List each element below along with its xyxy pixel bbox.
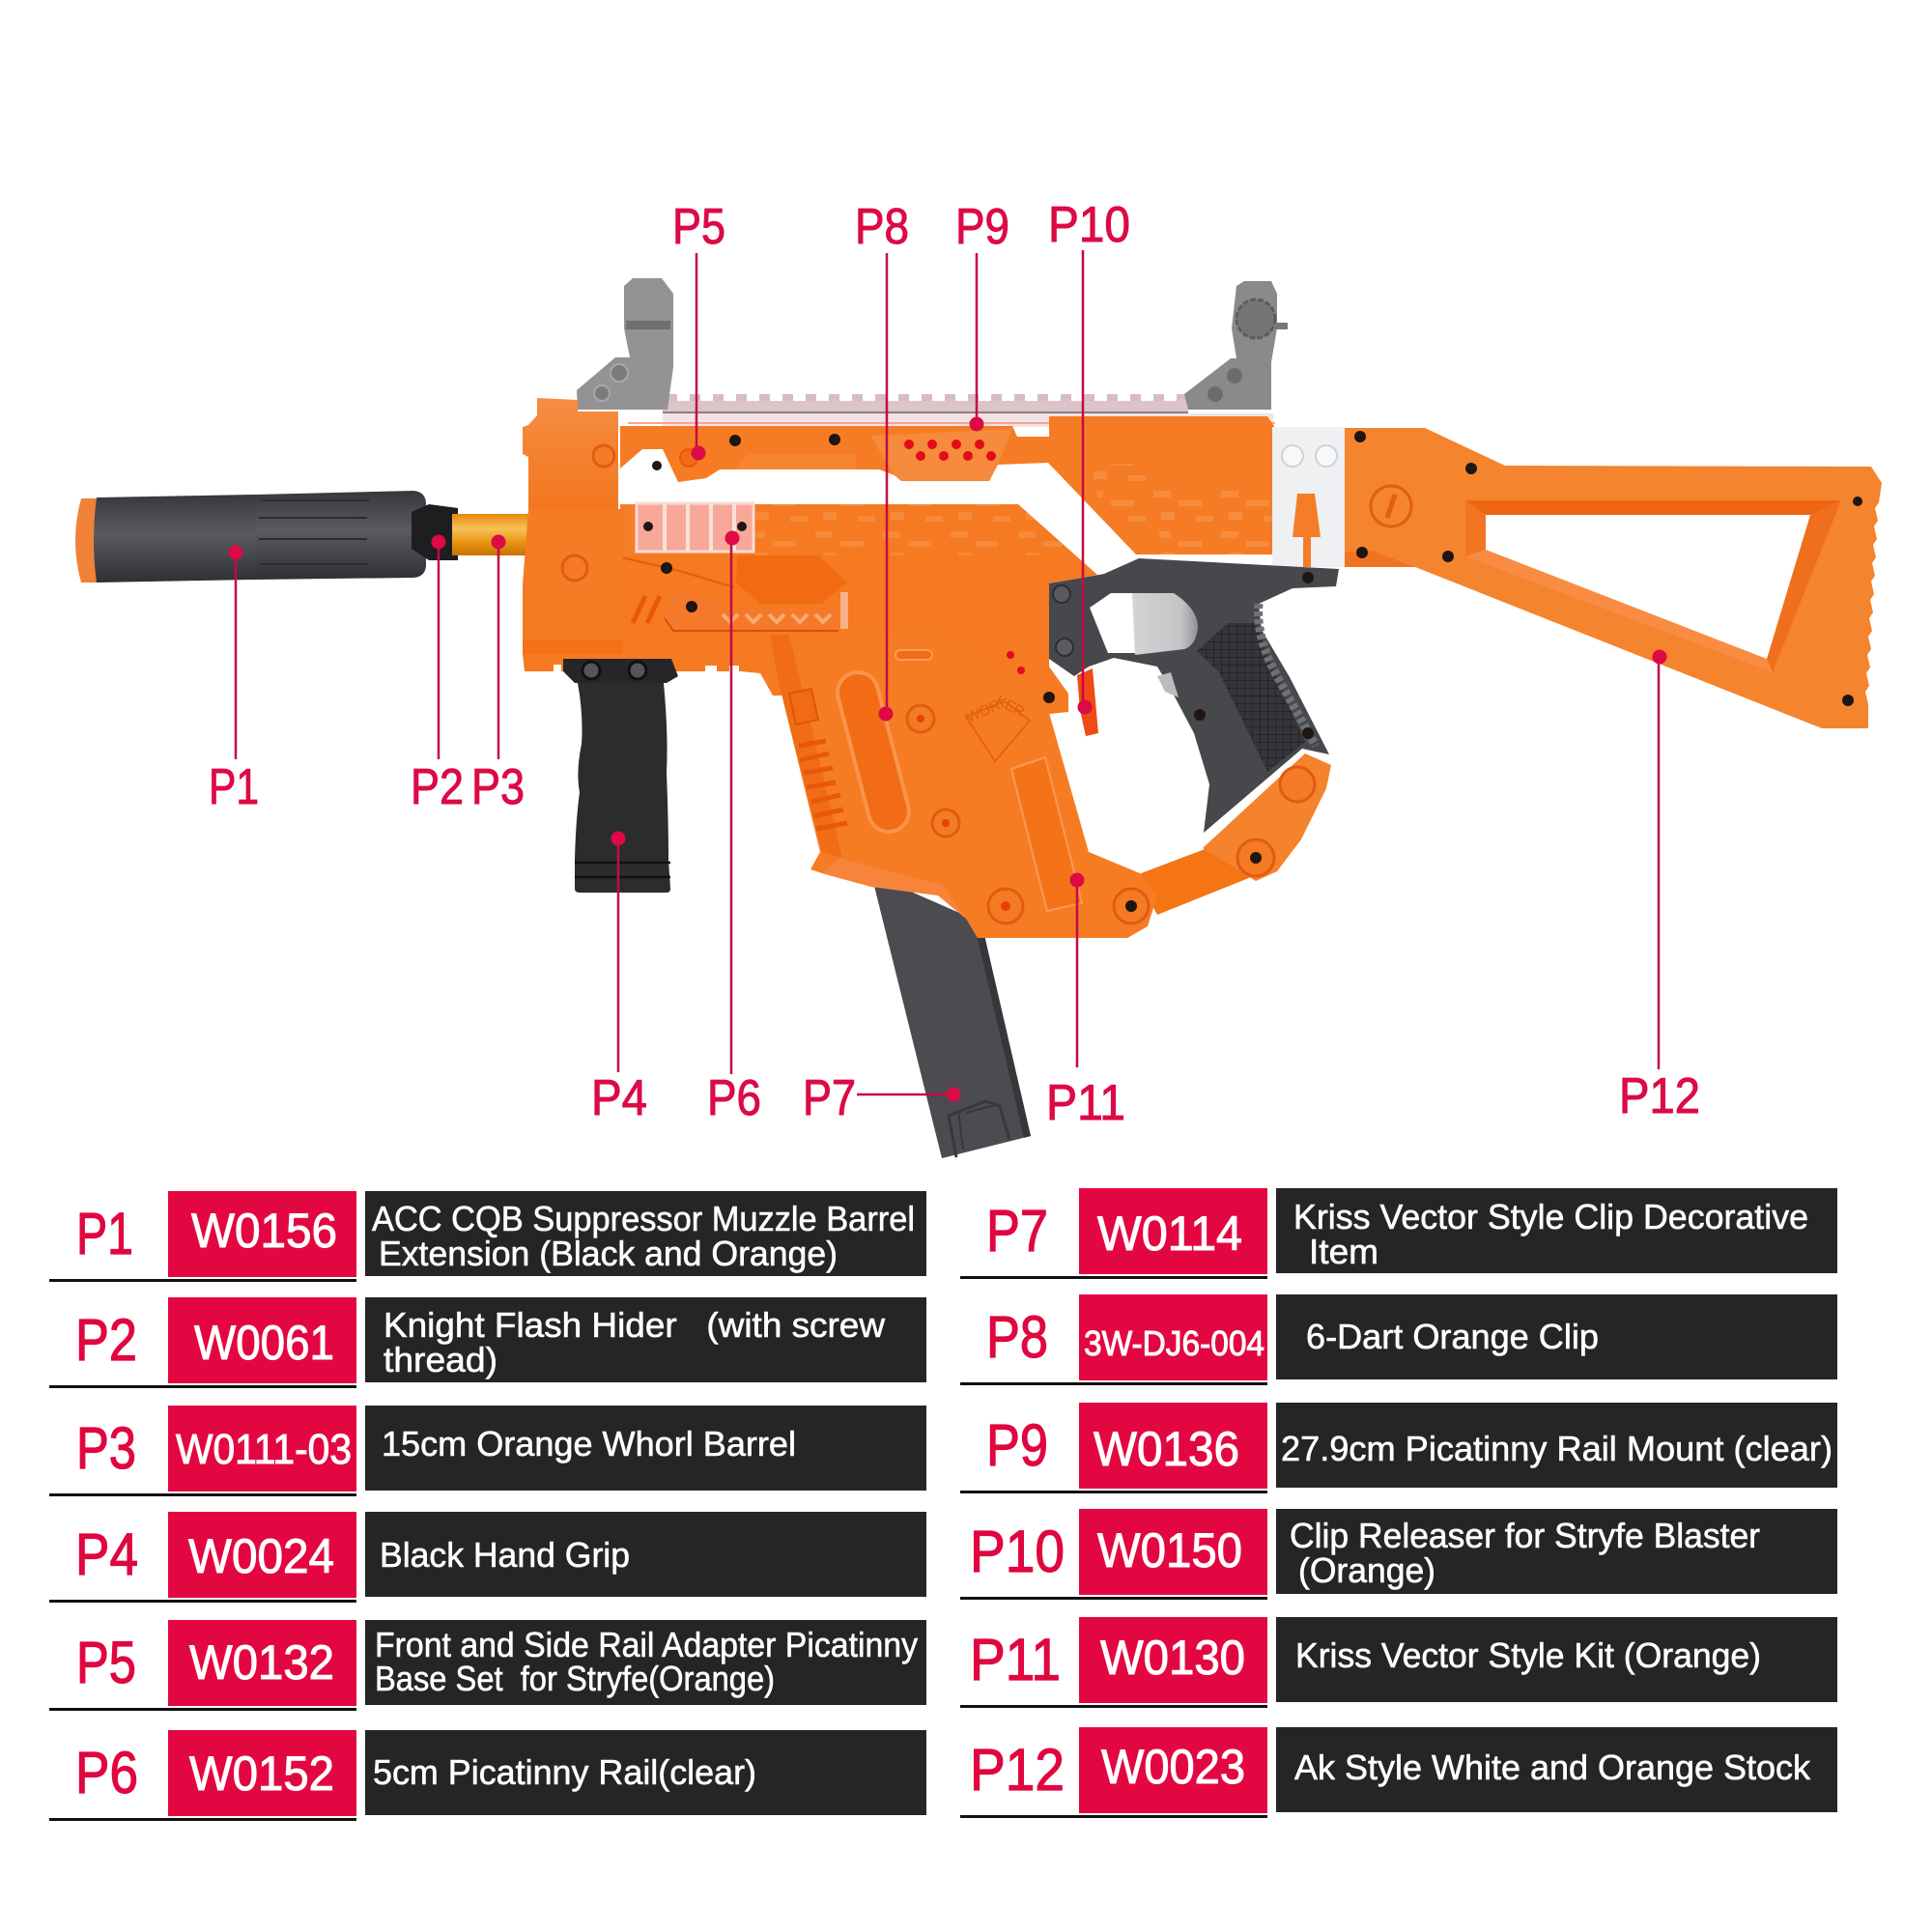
callout: P1: P1 <box>209 759 259 815</box>
magazine clip <box>871 874 1031 1158</box>
row: P1: W0156 <box>191 1204 337 1258</box>
row: P12: Ak Style White and Orange Stock <box>1294 1747 1811 1787</box>
row: P10 <box>960 1509 1837 1600</box>
row: P2: thread) <box>384 1340 497 1379</box>
callout: P4 <box>591 831 647 1126</box>
row: P8: 6-Dart Orange Clip <box>1306 1317 1599 1356</box>
row: P5 <box>49 1620 926 1711</box>
maker logo: KER <box>993 693 1027 721</box>
row: P12: P12 <box>970 1737 1065 1803</box>
flash hider <box>412 504 458 560</box>
callout: P11 <box>1046 873 1125 1131</box>
row: P4: Black Hand Grip <box>380 1535 630 1575</box>
row: P3: 15cm Orange Whorl Barrel <box>382 1424 796 1463</box>
upper receiver band <box>620 416 1274 554</box>
row: P6: P6 <box>75 1740 138 1805</box>
row: P10: P10 <box>970 1519 1065 1584</box>
row: P1 <box>49 1191 926 1282</box>
clip release trigger P10 <box>1077 668 1098 736</box>
row: P6: W0152 <box>189 1747 334 1801</box>
callout: P8: P8 <box>855 199 909 255</box>
white clip <box>1272 427 1345 567</box>
orange barrel <box>452 514 528 555</box>
row: P3 <box>49 1406 926 1496</box>
callout: P3: P3 <box>471 759 525 815</box>
row: P2 <box>49 1297 926 1388</box>
rail mount P9 <box>870 429 1012 481</box>
row: P1: P1 <box>76 1201 133 1266</box>
row: P7 <box>960 1188 1837 1279</box>
callout: P11: P11 <box>1046 1075 1125 1131</box>
callout: P2 <box>411 535 464 815</box>
row: P10: (Orange) <box>1298 1550 1435 1590</box>
row: P9: 27.9cm Picatinny Rail Mount (clear) <box>1281 1429 1833 1468</box>
callout: P7: P7 <box>803 1070 856 1126</box>
rear sight <box>1184 281 1288 410</box>
row: P10: W0150 <box>1097 1523 1242 1577</box>
trigger frame and pistol grip <box>1049 558 1339 833</box>
callout: P1 <box>209 545 259 815</box>
row: P4 <box>49 1512 926 1603</box>
row: P8: P8 <box>986 1304 1048 1370</box>
row: P7: Kriss Vector Style Clip Decorative <box>1293 1197 1808 1236</box>
lower receiver body <box>523 504 1097 714</box>
callout: P7 <box>803 1070 960 1126</box>
callout: P2: P2 <box>411 759 464 815</box>
row: P5: Front and Side Rail Adapter Picatinny <box>375 1625 918 1664</box>
foregrip <box>563 659 678 893</box>
row: P11: Kriss Vector Style Kit (Orange) <box>1295 1635 1761 1675</box>
callout: P8 <box>855 199 909 721</box>
row: P5: P5 <box>76 1630 136 1695</box>
row: P3: W0111-03 <box>176 1426 352 1473</box>
magwell <box>770 631 1157 938</box>
callout: P9 <box>955 199 1009 431</box>
row: P7: Item <box>1309 1232 1378 1271</box>
row: P4: P4 <box>75 1521 138 1587</box>
row: P10: Clip Releaser for Stryfe Blaster <box>1290 1516 1760 1555</box>
row: P8: 3W-DJ6-004 <box>1084 1323 1264 1363</box>
callout: P3 <box>471 535 525 815</box>
row: P5: W0132 <box>189 1635 334 1690</box>
callout: P5 <box>672 199 725 460</box>
row: P9: P9 <box>986 1412 1048 1478</box>
row: P12 <box>960 1727 1837 1818</box>
row: P6: 5cm Picatinny Rail(clear) <box>373 1752 756 1792</box>
trigger guard link <box>1136 753 1331 915</box>
row: P11: W0130 <box>1100 1631 1245 1685</box>
stock <box>1345 428 1882 728</box>
row: P2: Knight Flash Hider (with screw <box>384 1305 886 1345</box>
row: P1: Extension (Black and Orange) <box>379 1234 838 1273</box>
row: P8 <box>960 1294 1837 1385</box>
callout: P9: P9 <box>955 199 1009 255</box>
row: P2: P2 <box>75 1307 137 1373</box>
maker logo <box>964 693 1030 761</box>
row: P3: P3 <box>76 1415 136 1481</box>
callout: P12 <box>1619 649 1700 1124</box>
clear side rail P6 <box>637 503 753 552</box>
row: P5: Base Set for Stryfe(Orange) <box>375 1659 775 1698</box>
callout: P4: P4 <box>591 1070 647 1126</box>
row: P9 <box>960 1403 1837 1493</box>
clear picatinny rail P9 <box>628 394 1275 427</box>
row: P7: P7 <box>986 1198 1048 1264</box>
row: P9: W0136 <box>1094 1422 1239 1476</box>
row: P1: ACC CQB Suppressor Muzzle Barrel <box>372 1199 915 1238</box>
table: left parts list <box>49 1191 926 1821</box>
callout: P6: P6 <box>707 1070 761 1126</box>
callout: P5: P5 <box>672 199 725 255</box>
row: P6 <box>49 1730 926 1821</box>
maker logo: WOR <box>964 696 1003 726</box>
callout: P10: P10 <box>1048 197 1130 253</box>
row: P2: W0061 <box>194 1316 334 1370</box>
front sight <box>577 278 673 410</box>
row: P11 <box>960 1617 1837 1708</box>
callout: P6 <box>707 531 761 1126</box>
illustration: blaster <box>75 278 1882 1158</box>
row: P7: W0114 <box>1097 1207 1242 1261</box>
callout: P12: P12 <box>1619 1068 1700 1124</box>
row: P12: W0023 <box>1101 1740 1245 1794</box>
table: right parts list <box>960 1188 1837 1818</box>
row: P11: P11 <box>970 1627 1061 1692</box>
front block <box>523 398 623 654</box>
suppressor <box>75 491 426 582</box>
callout: P10 <box>1048 197 1130 715</box>
row: P4: W0024 <box>188 1529 334 1583</box>
